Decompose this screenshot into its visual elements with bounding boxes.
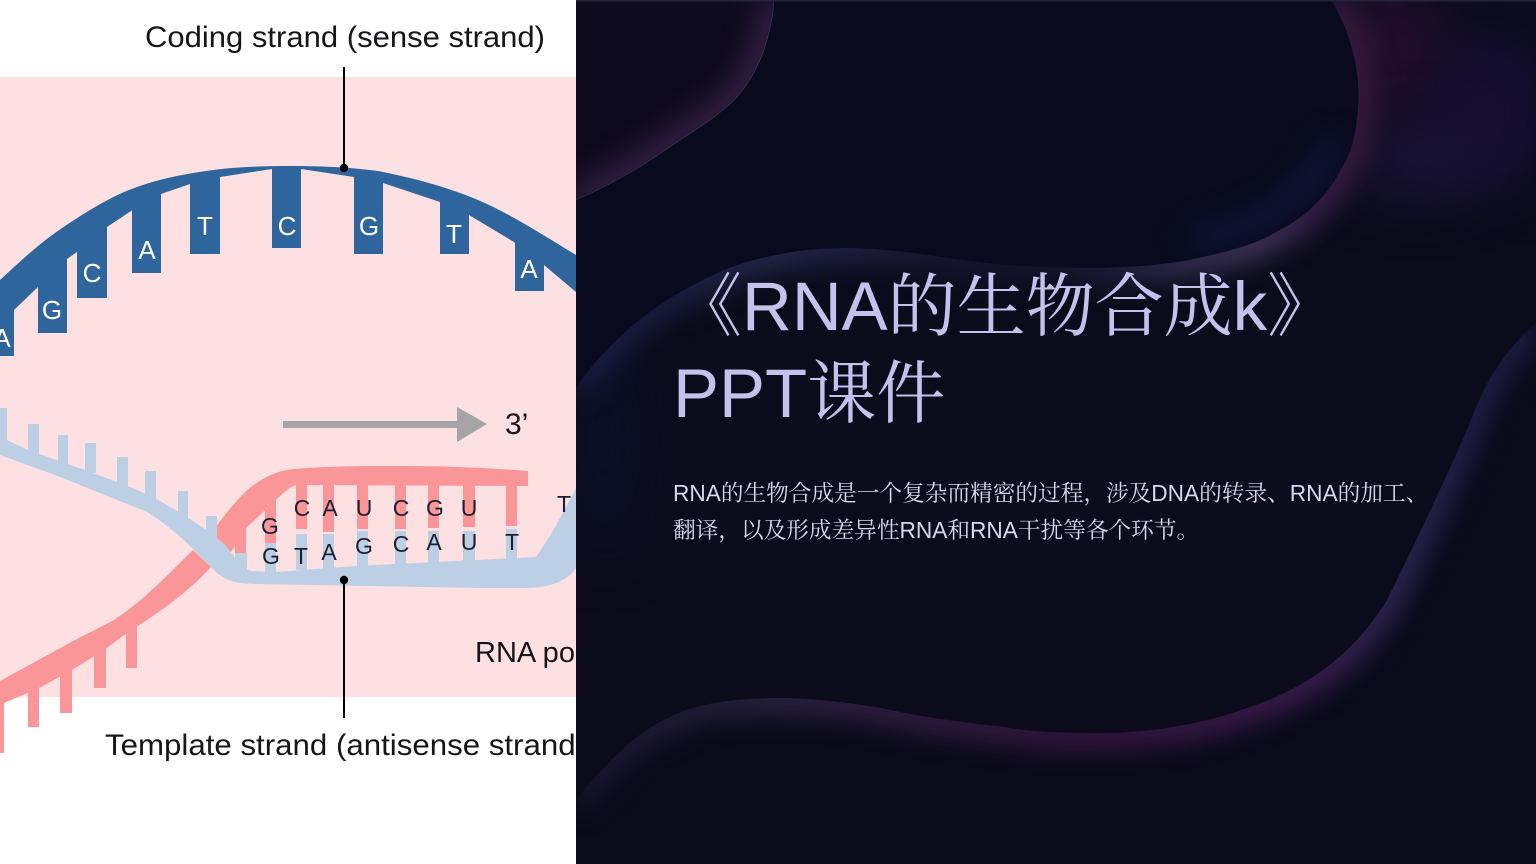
coding strand base letters: C — [83, 258, 101, 288]
label: 3 prime: 3’ — [505, 408, 528, 441]
coding strand base letters: A — [520, 254, 538, 284]
title — [673, 268, 1336, 432]
paired base letters: A — [426, 529, 442, 555]
paired base letters: T — [294, 543, 308, 569]
pink diagram background — [0, 77, 576, 697]
label: RNA polymerase: RNA polymerase — [475, 637, 693, 669]
coding strand base letters: A — [138, 235, 156, 265]
background wave: middle — [576, 2, 1536, 406]
arrow: transcription direction — [283, 407, 487, 442]
coding strand base letters: G — [42, 295, 62, 325]
description text: 翻译，以及形成差异性RNA和RNA干扰等各个环节。 — [673, 517, 1199, 544]
coding strand base letters: T — [197, 211, 213, 241]
paired base letters: C — [393, 531, 409, 557]
title: PPT课件 — [673, 355, 945, 432]
paired base letters: T — [557, 491, 571, 517]
label: template strand: Template strand (antisense strand) — [105, 729, 586, 762]
paired base letters: A — [322, 495, 338, 521]
coding strand (blue backbone with bases) — [0, 166, 576, 356]
coding strand base letters — [0, 211, 538, 353]
paired base letters: U — [356, 495, 372, 521]
panel: dark title slide — [575, 0, 1536, 864]
paired base letters: U — [461, 495, 477, 521]
paired base letters: G — [355, 533, 373, 559]
coding strand base letters: C — [278, 211, 296, 241]
paired base letters: T — [505, 529, 519, 555]
panel: DNA transcription diagram — [0, 26, 576, 761]
paired base letters: U — [461, 529, 477, 555]
paired base letters: C — [393, 495, 409, 521]
template strand (light blue) — [0, 408, 576, 588]
title: 《RNA的生物合成k》 — [673, 268, 1336, 345]
coding strand base letters: G — [359, 211, 379, 241]
leader line: template strand — [340, 576, 348, 718]
paired base letters: G — [426, 495, 444, 521]
paired base letters: G — [261, 513, 279, 539]
label: coding strand: Coding strand (sense strand) — [145, 21, 545, 54]
coding strand base letters: T — [446, 219, 462, 249]
inner shade: upper wave recess — [1190, 140, 1335, 240]
description text: RNA的生物合成是一个复杂而精密的过程，涉及DNA的转录、RNA的加工、 — [673, 480, 1428, 507]
paired base letters — [262, 496, 571, 564]
paired base letters: C — [294, 495, 310, 521]
description text — [673, 480, 1428, 544]
paired base letters: A — [321, 539, 337, 565]
background wave: bottom right — [581, 324, 1536, 798]
RNA strand (pink) — [0, 466, 528, 753]
paired base letters: G — [262, 543, 280, 569]
background wave: top left — [576, 0, 776, 200]
leader line: coding strand — [340, 67, 348, 172]
